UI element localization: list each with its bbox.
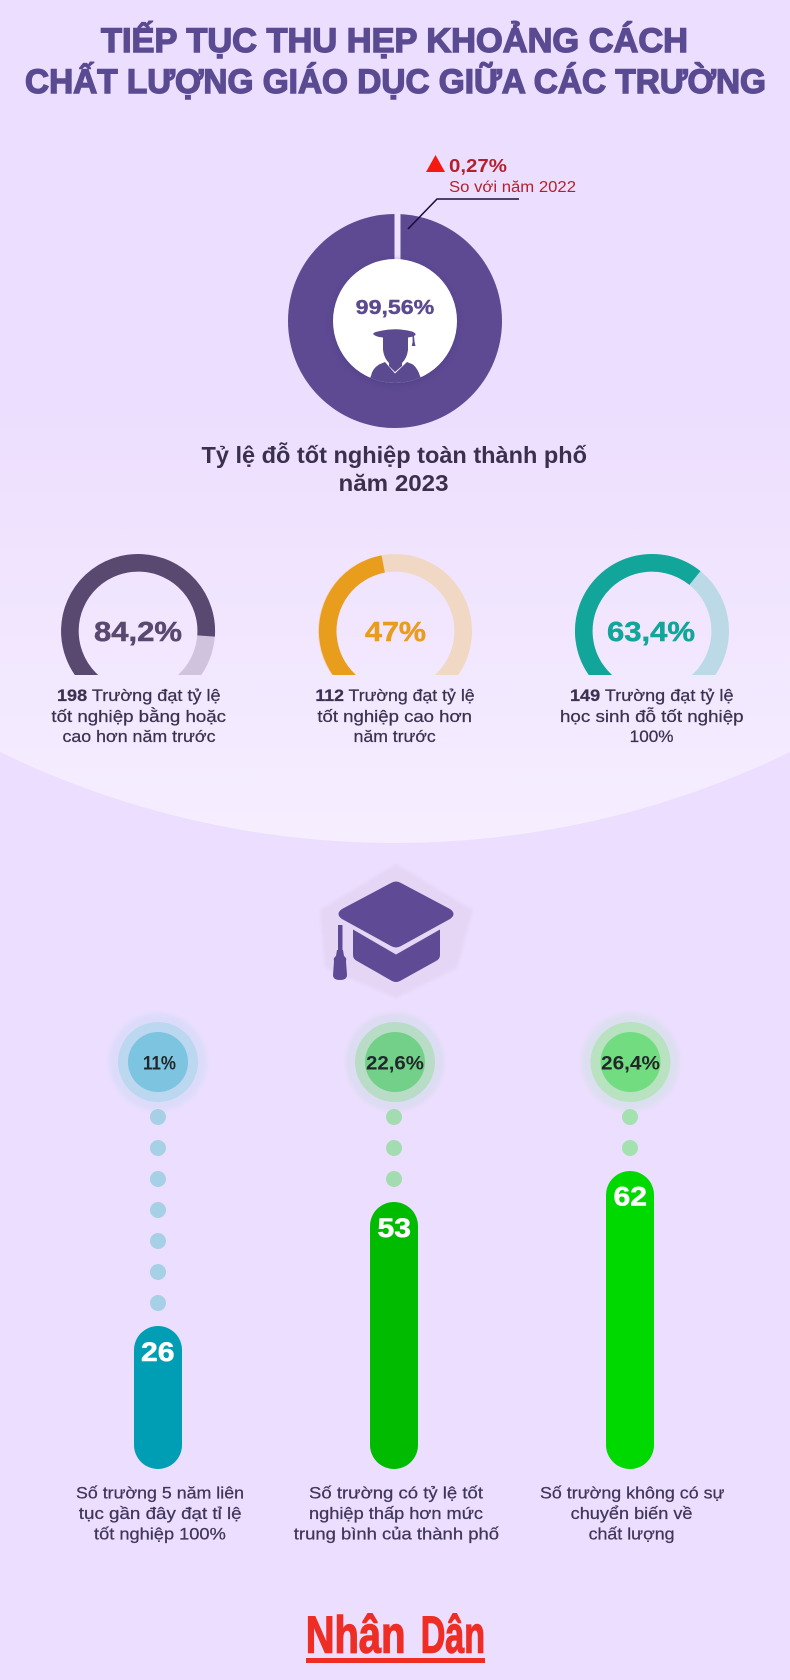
donut chart: graduation rate: [288, 212, 502, 428]
percentage bubble: [109, 1013, 207, 1111]
gauge description: cao hơn năm trước: [62, 727, 216, 746]
donut value: 99,56%: [356, 296, 434, 319]
gauge description: [560, 686, 744, 746]
gauge ring: [584, 563, 720, 699]
gauge ring: [70, 563, 206, 699]
percentage bubble: 11%: [143, 1054, 176, 1074]
bar label: [294, 1484, 500, 1544]
bar: 53: 53: [378, 1213, 411, 1243]
gauge description: [51, 686, 227, 746]
donut caption: [202, 441, 587, 496]
bar label: chất lượng: [589, 1524, 675, 1544]
background arc: [0, 0, 790, 843]
column: 26,4% stat: [540, 1013, 724, 1544]
bar label: [540, 1484, 724, 1544]
bar: 26: 26: [141, 1337, 174, 1367]
bar: 62: 62: [614, 1182, 647, 1212]
icon: red up triangle: [426, 155, 445, 172]
gauge description: 149 Trường đạt tỷ lệ: [570, 686, 734, 705]
logo: Nhân Dân: Nhân: [306, 1607, 406, 1665]
dotted connector: [386, 1109, 402, 1187]
bar: 53: [370, 1202, 418, 1469]
gauge value: 63,4%: [607, 616, 695, 647]
bar label: tốt nghiệp 100%: [94, 1524, 226, 1544]
gauge value: 47%: [365, 616, 426, 647]
icon: graduate: [370, 329, 421, 383]
gauge description: tốt nghiệp bằng hoặc: [51, 707, 227, 726]
percentage bubble: [582, 1013, 680, 1111]
bar: 26: [134, 1326, 182, 1469]
title: TIẾP TỤC THU HẸP KHOẢNG CÁCH: [101, 22, 688, 60]
bar label: Số trường có tỷ lệ tốt: [309, 1484, 483, 1502]
donut caption: năm 2023: [338, 470, 448, 496]
increase value: 0,27%: [449, 156, 507, 176]
dotted connector: [150, 1109, 166, 1311]
gauge description: [315, 686, 475, 746]
gauge ring: [327, 563, 463, 699]
icon: graduation cap: [320, 864, 473, 998]
donut caption: Tỷ lệ đỗ tốt nghiệp toàn thành phố: [202, 441, 587, 468]
dotted connector: [622, 1109, 638, 1156]
bar label: [76, 1484, 244, 1544]
column: 11% stat: [76, 1013, 244, 1544]
comparison note: So với năm 2022: [449, 179, 576, 196]
gauge panel: 84,2%: [51, 563, 227, 746]
gauge description: năm trước: [354, 727, 436, 746]
percentage bubble: 22,6%: [366, 1054, 424, 1074]
bar label: tục gần đây đạt tỉ lệ: [79, 1504, 242, 1523]
title: CHẤT LƯỢNG GIÁO DỤC GIỮA CÁC TRƯỜNG: [25, 63, 766, 101]
bar label: trung bình của thành phố: [294, 1524, 500, 1544]
gauge description: tốt nghiệp cao hơn: [317, 707, 472, 726]
percentage bubble: [346, 1013, 444, 1111]
percentage bubble: 26,4%: [601, 1054, 660, 1074]
gauge description: học sinh đỗ tốt nghiệp: [560, 707, 744, 726]
gauge value: 84,2%: [94, 616, 182, 647]
logo: Nhân Dân: Dân: [421, 1607, 485, 1665]
gauge description: 198 Trường đạt tỷ lệ: [57, 686, 221, 705]
gauge description: 112 Trường đạt tỷ lệ: [315, 686, 475, 705]
title: [25, 22, 766, 101]
callout: increase versus 2022: [408, 155, 576, 229]
bar label: chuyển biến về: [571, 1504, 692, 1523]
gauge panel: 63,4%: [560, 563, 744, 746]
bar: 62: [606, 1171, 654, 1469]
column: 22,6% stat: [294, 1013, 500, 1544]
gauge panel: 47%: [315, 563, 475, 746]
gauge description: 100%: [630, 727, 674, 746]
leader line: [408, 199, 519, 229]
bar label: nghiệp thấp hơn mức: [309, 1504, 484, 1523]
bar label: Số trường không có sự: [540, 1484, 724, 1502]
bar label: Số trường 5 năm liên: [76, 1484, 244, 1502]
